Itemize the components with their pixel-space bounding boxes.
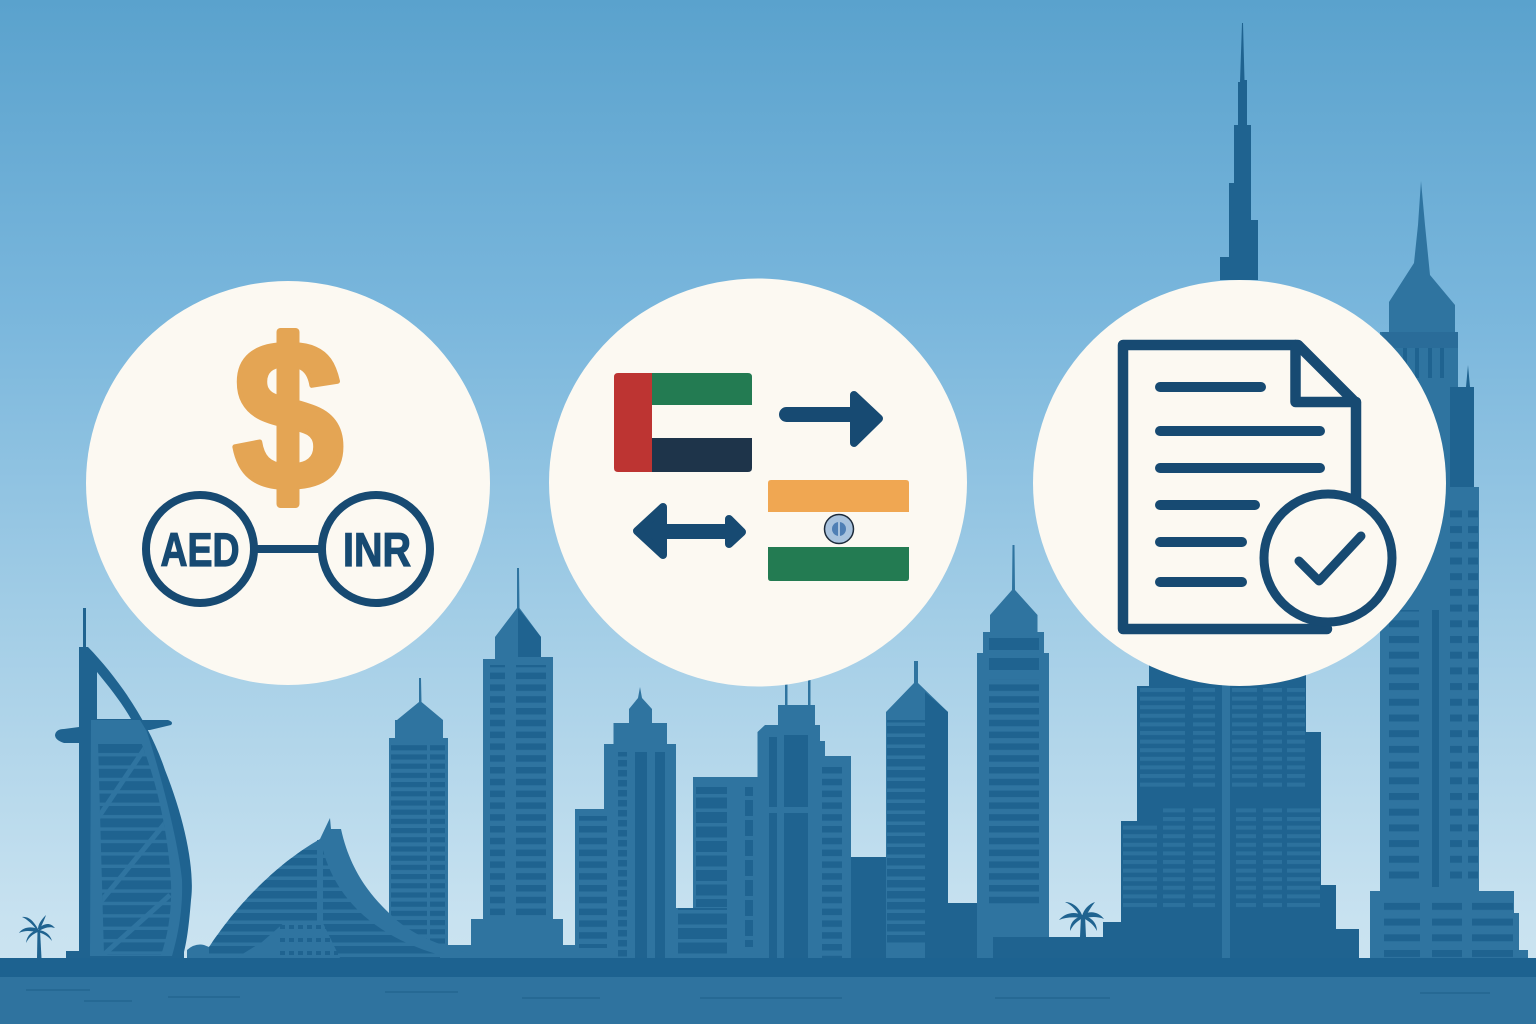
filler block	[851, 857, 887, 958]
low connector block	[448, 945, 578, 958]
sail floors	[98, 744, 171, 952]
document text lines	[1160, 387, 1320, 582]
sail inner body	[90, 720, 182, 956]
skyline: Burj Khalifa	[1103, 23, 1359, 958]
icon: India flag	[768, 480, 909, 581]
AED badge: AED	[160, 523, 240, 576]
right tower windows	[1384, 348, 1513, 958]
hotel podium	[236, 921, 340, 958]
tower B	[471, 568, 563, 958]
panel: flags transfer circle	[549, 278, 967, 686]
right tower annex	[1450, 365, 1474, 487]
ground strip	[0, 958, 1536, 977]
icon: palm tree right	[1059, 902, 1104, 937]
skyline: Jumeirah wave hotel	[187, 818, 468, 958]
low block right of tower F	[993, 922, 1140, 958]
Ashoka chakra	[824, 514, 854, 544]
INR badge: INR	[343, 523, 411, 576]
icon: UAE flag	[614, 373, 752, 472]
AED badge	[146, 495, 254, 603]
skyline: Burj Al Arab sail hotel	[55, 608, 192, 958]
skyline: mid-town towers	[389, 545, 1140, 958]
sky deck	[140, 720, 172, 730]
tower A	[389, 678, 448, 958]
icon: approval check badge	[1264, 494, 1392, 622]
icon: palm tree left	[19, 915, 55, 958]
tower C	[575, 687, 676, 958]
panel: approved document circle	[1033, 280, 1446, 686]
tower D	[676, 680, 851, 958]
water	[0, 977, 1536, 1024]
Burj Khalifa window bands	[1123, 680, 1320, 958]
tower F	[977, 545, 1049, 958]
icon: document	[1123, 345, 1356, 629]
icon: dollar sign: $	[232, 297, 344, 536]
arrow: double-headed	[637, 507, 742, 555]
tower E	[886, 661, 948, 958]
INR badge	[322, 495, 430, 603]
skyline: right tower	[1370, 181, 1528, 958]
panel: currency exchange circle	[86, 281, 490, 685]
low block beside tower E	[948, 903, 980, 958]
connector between currencies	[256, 545, 322, 553]
arrow: right	[786, 395, 879, 443]
